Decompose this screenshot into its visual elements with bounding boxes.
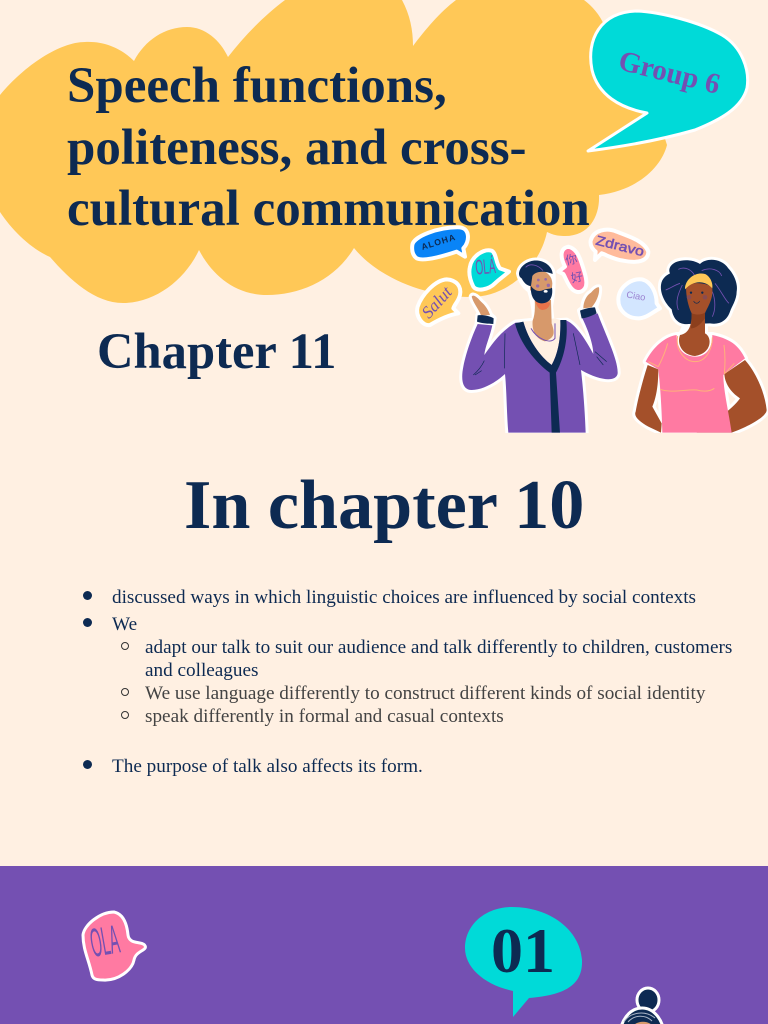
- figure: woman's head with hair bun: [620, 988, 664, 1024]
- bubble: Ciao: Ciao: [626, 289, 646, 303]
- woman: facial features: [690, 291, 703, 294]
- title: Speech functions,: [67, 58, 447, 114]
- bubble: Ola teal: OLÁ: [474, 254, 496, 280]
- woman figure: [635, 260, 767, 433]
- bullet: We: We: [112, 614, 137, 635]
- woman: white sticker outline: [635, 260, 767, 433]
- illustration: people with multilingual speech bubbles: [410, 225, 768, 433]
- woman: shirt: [646, 335, 745, 433]
- bullet list: [83, 587, 732, 777]
- heading: In chapter 10: In chapter 10: [184, 466, 584, 544]
- woman: face and neck: [679, 283, 712, 356]
- man: hair: [519, 260, 553, 286]
- bullet: social contexts: discussed ways in which linguistic choices are influenced by social contexts: [112, 587, 696, 608]
- man: cuffs: [477, 307, 597, 324]
- man: beard: [531, 286, 552, 303]
- speech bubble: 01: [465, 907, 582, 1017]
- man: cheek marks: [536, 278, 550, 288]
- bubble: Chinese greeting: [558, 247, 586, 292]
- sub-bullet: audience: adapt our talk to suit our audience and talk differently to children, customers: [145, 637, 732, 658]
- sub-bullet: audience: and colleagues: [145, 660, 258, 681]
- woman: cheeks: [687, 295, 707, 300]
- man: sleeve folds: [473, 333, 607, 375]
- man: white sticker outline: [462, 260, 618, 433]
- sub-bullet: audience: [121, 637, 732, 681]
- woman: shirt seams: [648, 336, 734, 391]
- bullet: We: [83, 614, 137, 635]
- man figure: [462, 260, 618, 433]
- sub-bullet: formal and casual: speak differently in formal and casual contexts: [145, 706, 504, 727]
- sticker: Ola: [83, 912, 145, 980]
- man: hands: [472, 287, 599, 315]
- title: [67, 58, 590, 237]
- bubbles right group: [558, 230, 660, 318]
- man: necklace: [531, 323, 555, 341]
- man: face: [530, 272, 552, 291]
- man: cardigan trim: [515, 320, 567, 433]
- bubble: Chinese greeting: 好: [569, 267, 585, 287]
- speech bubble: Group 6: [586, 10, 749, 152]
- sub-bullet: social identity: We use language differently to construct different kinds of social identity: [145, 683, 705, 704]
- purple panel: [0, 866, 768, 1024]
- sticker: Ola: OLA: [87, 918, 123, 966]
- label: Group 6: Group 6: [615, 45, 723, 101]
- title: politeness, and cross-: [67, 120, 527, 176]
- chapter label: Chapter 11: [97, 323, 336, 379]
- man: shirt: [523, 318, 560, 365]
- bubble: Chinese greeting: 你: [564, 250, 579, 269]
- man: hair strand: [526, 265, 543, 271]
- title: cultural communication: [67, 181, 590, 237]
- woman: hair: [661, 260, 737, 324]
- bubble: Aloha: ALOHA: [420, 232, 457, 252]
- yellow cloud speech bubble: [0, 0, 667, 303]
- bubble: Salut: Salut: [418, 282, 457, 322]
- bullet: purpose of talk: The purpose of talk also affects its form.: [112, 756, 423, 777]
- woman: smile: [694, 301, 700, 303]
- man: mouth: [544, 290, 548, 293]
- bubbles left group: [412, 227, 509, 325]
- man: neck shadow: [535, 300, 550, 310]
- man: cardigan: [462, 313, 618, 433]
- woman: headband: [685, 273, 713, 289]
- woman: neck shadow: [691, 313, 705, 328]
- woman: arms: [635, 360, 767, 433]
- woman: hair strands: [666, 268, 729, 317]
- man: neck: [532, 300, 554, 342]
- speech bubble: 01: 01: [491, 915, 555, 986]
- bubble: Zdravo: Zdravo: [594, 233, 646, 259]
